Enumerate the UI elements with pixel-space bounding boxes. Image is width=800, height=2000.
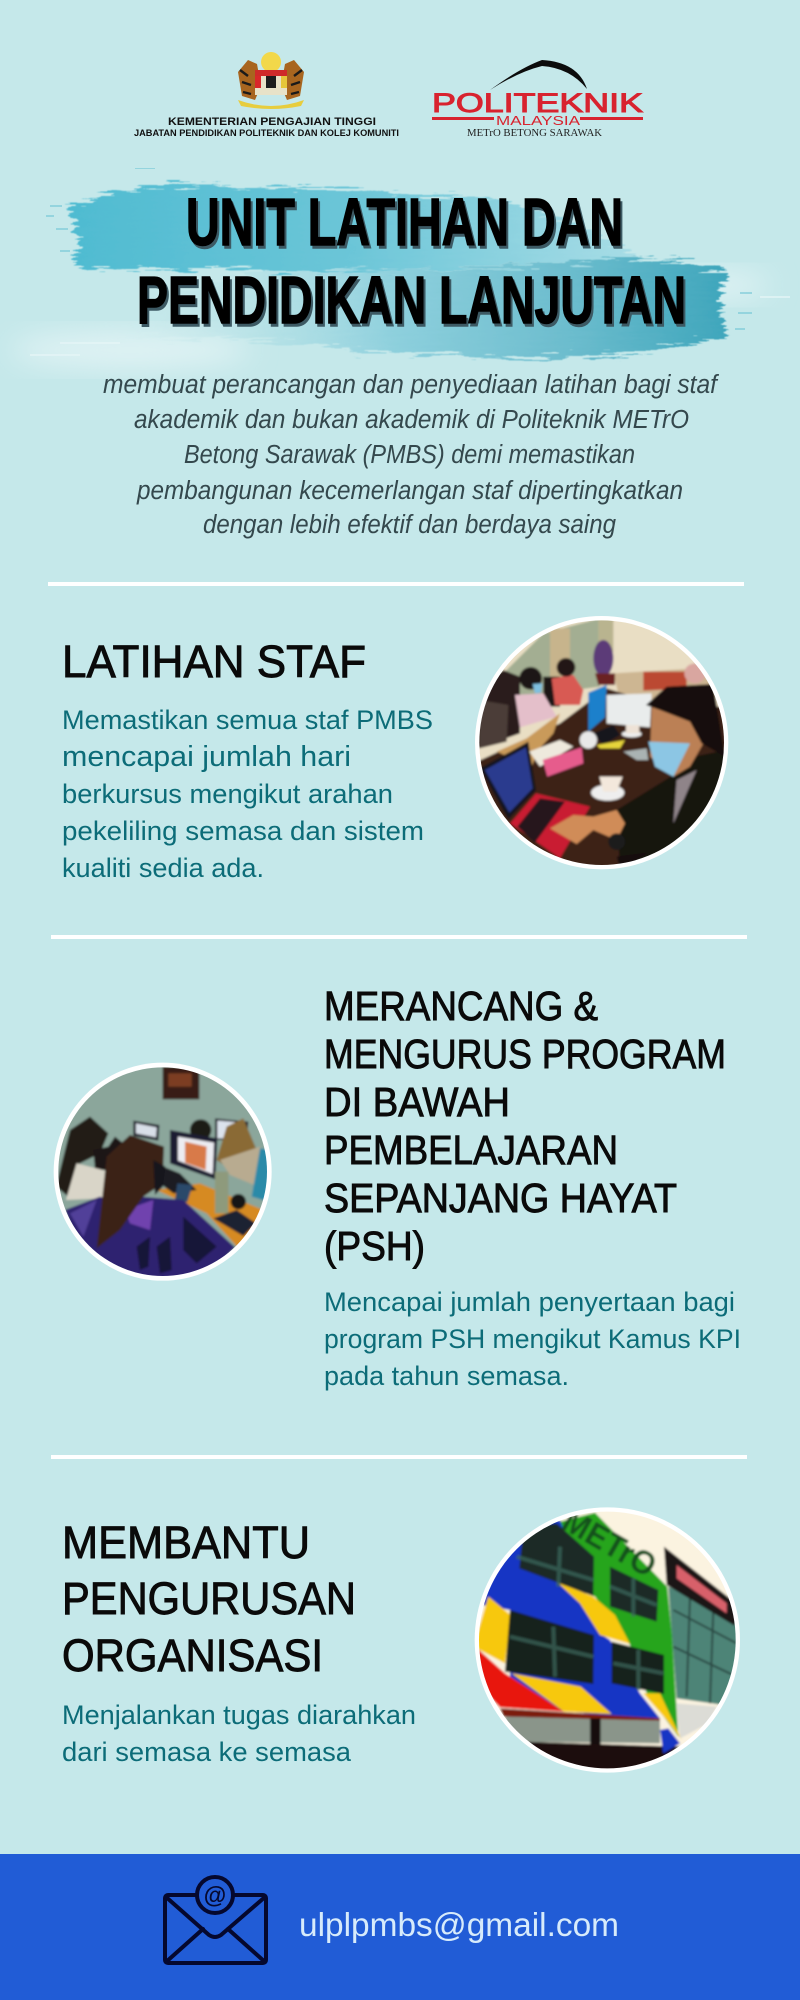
title <box>137 185 686 338</box>
icon: black arc <box>490 60 587 90</box>
logo: Malaysian coat of arms with ministry name <box>134 52 399 139</box>
photo: METrO building <box>473 1502 743 1777</box>
heading: PEMBELAJARAN <box>324 1127 618 1173</box>
panel: Membantu pengurusan organisasi <box>62 1502 743 1777</box>
title: UNIT LATIHAN DAN <box>186 185 623 260</box>
intro text <box>103 371 720 539</box>
intro text: akademik dan bukan akademik di Politeknik METrO <box>134 406 689 434</box>
body text: dari semasa ke semasa <box>62 1737 352 1767</box>
signage text on building: METrO <box>556 1502 663 1585</box>
body text: Memastikan semua staf PMBS <box>62 705 433 735</box>
ministry name: KEMENTERIAN PENGAJIAN TINGGI <box>168 116 376 128</box>
contact email: ulplpmbs@gmail.com <box>299 1906 619 1943</box>
body text: Mencapai jumlah penyertaan bagi <box>324 1287 735 1317</box>
intro text: membuat perancangan dan penyediaan latihan bagi staf <box>103 371 720 399</box>
heading <box>62 1517 356 1681</box>
footer band <box>0 1854 800 2000</box>
department name: JABATAN PENDIDIKAN POLITEKNIK DAN KOLEJ KOMUNITI <box>134 128 399 139</box>
body text <box>324 1287 741 1391</box>
icon: coat of arms <box>238 52 304 109</box>
body text: pada tahun semasa. <box>324 1361 569 1391</box>
heading: MERANCANG & <box>324 983 598 1029</box>
body text <box>62 1700 416 1767</box>
panel: Latihan Staf <box>62 616 733 883</box>
heading: ORGANISASI <box>62 1630 323 1681</box>
intro text: Betong Sarawak (PMBS) demi memastikan <box>184 441 635 469</box>
body text: mencapai jumlah hari <box>62 741 351 773</box>
campus name: METrO BETONG SARAWAK <box>467 128 603 139</box>
heading <box>324 983 726 1269</box>
heading: SEPANJANG HAYAT <box>324 1175 677 1221</box>
body text: pekeliling semasa dan sistem <box>62 816 424 846</box>
heading: DI BAWAH <box>324 1079 510 1125</box>
wordmark: POLITEKNIK <box>432 88 643 118</box>
brush stroke behind title <box>10 168 790 368</box>
heading: PENGURUSAN <box>62 1573 356 1624</box>
body text: berkursus mengikut arahan <box>62 779 393 809</box>
heading: (PSH) <box>324 1223 425 1269</box>
intro text: dengan lebih efektif dan berdaya saing <box>203 511 616 539</box>
heading: LATIHAN STAF <box>62 636 366 687</box>
photo: staff at meeting table <box>473 616 733 870</box>
heading: MEMBANTU <box>62 1517 310 1568</box>
icon: envelope with at sign <box>165 1877 266 1963</box>
body text: kualiti sedia ada. <box>62 853 264 883</box>
heading: MENGURUS PROGRAM <box>324 1031 726 1077</box>
body text <box>62 705 433 883</box>
photo: staff at computers <box>53 1063 273 1283</box>
malaysia: MALAYSIA <box>496 113 580 128</box>
logo: Politeknik Malaysia <box>432 60 643 139</box>
body text: Menjalankan tugas diarahkan <box>62 1700 416 1730</box>
intro text: pembangunan kecemerlangan staf dipertingkatkan <box>136 477 683 505</box>
body text: program PSH mengikut Kamus KPI <box>324 1324 741 1354</box>
panel: Merancang dan mengurus program PSH <box>53 983 741 1391</box>
icon: envelope with at sign: @ <box>204 1882 226 1908</box>
